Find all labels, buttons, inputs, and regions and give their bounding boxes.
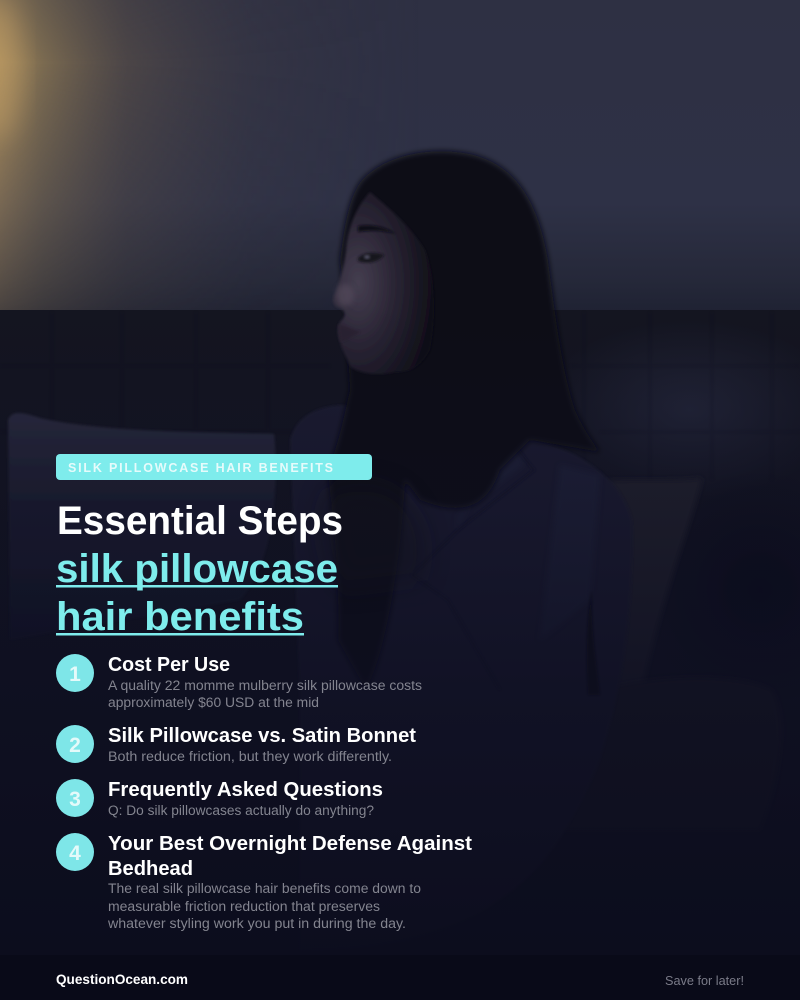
step 4: whatever styling work you put in during the day. <box>107 916 406 931</box>
step 2: Silk Pillowcase vs. Satin Bonnet <box>108 725 416 747</box>
woman: face in profile <box>333 192 434 374</box>
step 2 <box>56 725 416 764</box>
background: pillows <box>8 413 781 830</box>
step 4: The real silk pillowcase hair benefits come down to <box>108 881 421 896</box>
step 2: Both reduce friction, but they work differently. <box>108 749 392 764</box>
step 4: Bedhead <box>108 858 193 880</box>
step 4: measurable friction reduction that preserves <box>108 899 380 914</box>
step 4 <box>56 833 472 931</box>
step 1: approximately $60 USD at the mid <box>108 695 319 710</box>
background: bedroom wall with lamp glow <box>0 0 800 312</box>
category pill <box>56 454 372 480</box>
step 4: Your Best Overnight Defense Against <box>108 833 472 855</box>
footer brand: QuestionOcean.com <box>56 971 188 987</box>
step 4: 4 <box>69 842 81 865</box>
step 3: Q: Do silk pillowcases actually do anything? <box>108 803 374 818</box>
woman: shirt and shoulders <box>290 405 632 950</box>
title: silk pillowcase <box>56 547 338 591</box>
title: Essential Steps <box>57 499 343 543</box>
woman: hair <box>328 151 600 695</box>
woman: hand and mug <box>321 483 425 590</box>
step 3: 3 <box>69 788 81 811</box>
step 1: 1 <box>69 663 81 686</box>
category pill: SILK PILLOWCASE HAIR BENEFITS <box>68 461 333 475</box>
step 1: Cost Per Use <box>108 654 230 676</box>
step 3: Frequently Asked Questions <box>108 779 383 801</box>
step 2: 2 <box>69 734 81 757</box>
dark vertical overlay <box>0 300 800 1000</box>
step 1: A quality 22 momme mulberry silk pillowcase costs <box>108 678 422 693</box>
step 3 <box>56 779 383 818</box>
title <box>56 499 343 639</box>
footer bar background <box>0 955 800 1000</box>
title: hair benefits <box>56 595 304 639</box>
background: padded headboard <box>0 310 800 1000</box>
step 1 <box>56 654 422 710</box>
footer note: Save for later! <box>665 973 744 988</box>
